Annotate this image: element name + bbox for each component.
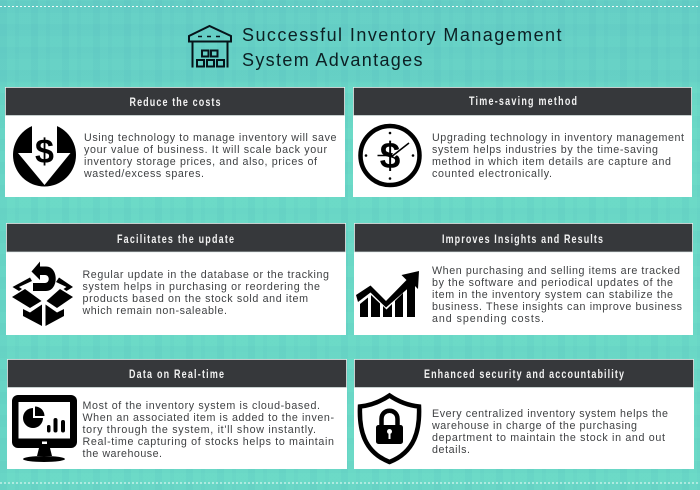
text block: business. These insights can improve business — [432, 301, 682, 313]
icon: dollar down arrow: $ — [35, 133, 54, 171]
text block: warehouse in charge of the purchasing — [431, 420, 637, 432]
text block: department to maintain the stock in and out — [432, 432, 665, 444]
text block — [82, 269, 329, 317]
icon: box with return arrow — [12, 262, 73, 326]
icon: dollar down arrow — [13, 122, 76, 186]
text block: details. — [432, 444, 470, 456]
heading: data on real-time: Data on Real-time — [129, 369, 224, 381]
text block: Most of the inventory system is cloud-based. — [82, 400, 320, 412]
text block: Every centralized inventory system helps the — [432, 408, 668, 420]
icon: shield with padlock — [360, 396, 419, 462]
text block: When purchasing and selling items are tracked — [432, 265, 680, 277]
heading: data on real-time — [8, 360, 346, 388]
text block: counted electronically. — [432, 168, 552, 180]
heading: enhanced security and accountability — [354, 360, 694, 388]
text block — [432, 265, 682, 325]
heading: time-saving method: Time-saving method — [469, 96, 577, 108]
text block: products based on the stock sold and item — [82, 293, 308, 305]
text block — [82, 400, 334, 460]
title — [242, 25, 562, 70]
title: System Advantages — [242, 50, 422, 70]
icon: monitor with charts — [12, 395, 77, 462]
text block — [431, 408, 668, 456]
text block: system helps in purchasing or reordering the — [82, 281, 320, 293]
text block: Real-time capturing of stocks helps to maintain — [82, 436, 334, 448]
icon: rising chart arrow — [356, 271, 419, 317]
heading: facilitates the update: Facilitates the update — [117, 234, 234, 246]
panel: enhanced security and accountability — [354, 359, 694, 469]
text block: and spending costs. — [432, 313, 544, 325]
panel: facilitates the update — [6, 223, 346, 335]
title: Successful Inventory Management — [242, 25, 562, 45]
heading: time-saving method — [354, 88, 692, 116]
text block: which remain non-saleable. — [82, 305, 227, 317]
heading: improves insights and results — [354, 224, 692, 252]
panel: improves insights and results — [354, 223, 693, 335]
heading: reduce the costs — [6, 88, 344, 116]
text block: inventory storage prices, and also, prices of — [84, 156, 317, 168]
panel: reduce the costs — [5, 87, 345, 197]
icon: clock with dollar — [360, 126, 420, 185]
text block — [83, 132, 337, 180]
text block: method in which item details are capture and — [432, 156, 671, 168]
heading: enhanced security and accountability: Enhanced security and accountability — [424, 369, 624, 381]
text block: your value of business. It will scale back your — [84, 144, 327, 156]
text block: wasted/excess spares. — [83, 168, 204, 180]
panel: data on real-time — [7, 359, 347, 469]
text block: Using technology to manage inventory will save — [84, 132, 337, 144]
text block: Regular update in the database or the tracking — [82, 269, 329, 281]
panel: time-saving method — [353, 87, 692, 197]
text block: the warehouse. — [82, 448, 162, 460]
heading: reduce the costs: Reduce the costs — [130, 97, 221, 109]
heading: facilitates the update — [6, 224, 346, 252]
icon: warehouse — [189, 26, 231, 68]
icon: clock with dollar: $ — [380, 135, 401, 176]
text block — [432, 132, 684, 180]
heading: improves insights and results: Improves Insights and Results — [442, 234, 603, 246]
text block: by the software and periodical updates of the — [432, 277, 673, 289]
text block: item in the inventory system can stabilize the — [432, 289, 673, 301]
text block: tory through the system, it'll show instantly. — [82, 424, 316, 436]
text block: system helps industries by the time-saving — [432, 144, 658, 156]
text block: When an associated item is added to the inven- — [82, 412, 334, 424]
text block: Upgrading technology in inventory management — [432, 132, 684, 144]
